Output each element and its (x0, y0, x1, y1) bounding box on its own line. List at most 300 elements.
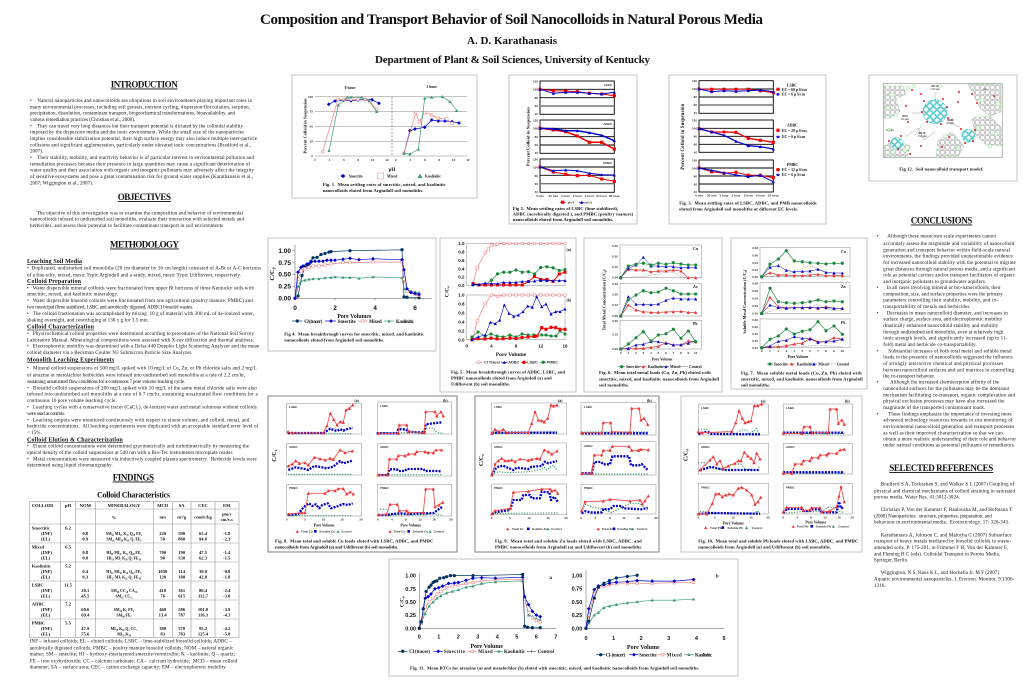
label b: (b) (845, 400, 850, 404)
legend: Mixed (670, 365, 681, 369)
text block: conclusions: ionic strength levels, and significantly increased (up to 11- (883, 337, 1008, 342)
text: monolith leaching experiments: continuous 16 pore volume leaching cycle. (27, 399, 117, 404)
table: colloid characteristics: 39.0 (199, 569, 208, 574)
plot: LSBC (533, 80, 614, 116)
plot: b: 0.6 (458, 311, 465, 316)
plots: column a: PMBC (289, 486, 299, 490)
axis label: Soluble Metal Concentration (C/C₀) (742, 269, 747, 334)
plots: column b: LSBC (786, 406, 795, 410)
axis label: C/C₀ (479, 454, 485, 466)
legend: Smectite (338, 320, 356, 325)
axis label: Percent Colloid in Suspension (681, 103, 686, 170)
table: colloid characteristics: SM₄₅ MI₂₅ K₁₅ Q₁₀ FE₅ (106, 532, 143, 536)
plots: column b: 4 (391, 518, 393, 522)
caption (323, 182, 446, 193)
table: colloid characteristics: 116.3 (198, 613, 209, 618)
text: monolith leaching experiments: • Leaching cycles with a conservative tracer (CaCl₂), de-ionized water and metal solutions without colloids (27, 406, 257, 411)
plots: column b: 20 (449, 518, 453, 522)
plot: LSBC: 120 (533, 80, 538, 84)
plot: ADBC: ADBC (603, 122, 613, 126)
subheading: colloid characterization: Colloid Characterization (27, 325, 95, 331)
plot: Pb: 1 (769, 349, 771, 353)
axis title: Pore Volume (652, 358, 673, 362)
plot: ADBC: 60 (535, 143, 538, 147)
plots: column a: 20 (564, 516, 568, 520)
table: colloid characteristics: EM (223, 503, 231, 508)
text block: conclusions: • (877, 381, 879, 386)
plot: Pb: 10 (694, 351, 698, 355)
plot: Cu: 0.00 (612, 276, 618, 280)
axis title a: Pore Volume (723, 522, 744, 526)
plot: PMBC: 120 (533, 158, 538, 162)
text block: introduction: of sensitive ecosystems and pose a great contamination risk for ground water supplies (Karathanasis et al., (30, 175, 253, 180)
plot: PMBC: 3 hour (744, 194, 754, 198)
plot: Pb: 2 (635, 351, 637, 355)
plots: column a: 20 (359, 518, 363, 522)
axis title b: Pore Volume (400, 524, 421, 528)
text block: introduction: 2007; Wiggington et al., 2007). (30, 181, 93, 186)
table notes: aerobically digested colloids; PMBC – poultry manure biosolid colloids; NOM – natural organic (30, 646, 234, 651)
table: colloid characteristics: SM₇₀ K₅ FE₅ (114, 608, 135, 612)
text: leaching soil media: • Duplicated, undisturbed soil monoliths (20 cm diameter by 36 cm length) consisted of A-Bt or A-C horizons (27, 266, 261, 271)
caption: Fig. 3. Mean settling rates of LSBC, ADBC, and PMB nanocolloids (679, 200, 817, 205)
caption: Fig. 5. Mean breakthrough curves of ADBC, LSBC, and (451, 370, 565, 375)
table: colloid characteristics: 112.7 (198, 594, 209, 599)
heading: conclusions: CONCLUSIONS (911, 216, 972, 226)
panel: figure 1 settling rates by pH: 2 (314, 158, 316, 162)
text block: references: physical and chemical mechanisms of colloid straining in saturated (874, 489, 1016, 494)
plots: column b: 12 (418, 518, 422, 522)
text block: conclusions: fold) metal and herbicide co-transportability. (883, 343, 977, 348)
text: monolith leaching experiments: were used as controls. (27, 412, 65, 417)
panel: figure 4 breakthrough curves: 0 (293, 305, 297, 312)
plots: column a: LSBC (701, 406, 710, 410)
legend b: Control (637, 527, 648, 531)
table: colloid characteristics: cm/v.s (221, 517, 233, 522)
table: colloid characteristics: -2.3 (223, 537, 231, 542)
plot: PMBC: 30 min (707, 194, 717, 198)
table: colloid characteristics: 94.8 (199, 537, 208, 542)
model labels (886, 86, 987, 138)
plot: Pb: 3 (785, 349, 787, 353)
series: mixed (323, 99, 452, 153)
plot: PMBC: 2 hour (731, 194, 741, 198)
text: colloid preparation: smectitic, mixed, and kaolinitic mineralogy. (27, 293, 118, 298)
text: monolith leaching experiments: of atrazine or metolachlor herbicides were infused into undisturbed soil monoliths at a rate of 2.2 cm/hr, (27, 374, 245, 379)
text block: references: behaviour in environmental media. Ecotoxicology. 17: 326-343. (874, 521, 1009, 526)
panel: figure 1 settling rates by pH: 0 (311, 154, 313, 158)
table: colloid characteristics: SM₃₀ CC₅₀ CA₂₀ (111, 589, 138, 593)
series: smectite (295, 258, 419, 298)
microbial and organic coatings (886, 84, 1000, 154)
table: colloid characteristics: 220 (159, 531, 167, 536)
plot: b (458, 293, 568, 348)
table: colloid characteristics: 114 (178, 569, 186, 574)
axis label: Percent Colloid in Suspension (302, 98, 308, 154)
plot: b: 0.0 (458, 337, 465, 342)
plots: column b: 20 (850, 516, 854, 520)
text: colloid elution and characterization: determined using liquid chromatography. (27, 464, 113, 469)
text block: conclusions: In all cases involving mineral or bio-nanocolloids, their (887, 286, 1001, 291)
text block: conclusions: surface charge, surface area, and electrophoretic mobility (883, 318, 1003, 323)
text block: conclusions: and inorganic pollutants to groundwater aquifers. (883, 280, 986, 285)
nanocolloid lattices (891, 100, 975, 149)
label a: (a) (354, 399, 360, 403)
table: colloid characteristics: SA (179, 503, 185, 508)
table: colloid characteristics: 0.8 (82, 550, 89, 555)
soil aggregates (884, 84, 1002, 157)
plot: a atrazine: 4 (496, 635, 500, 641)
heading: findings: FINDINGS (113, 472, 154, 482)
table: colloid characteristics: -1.5 (223, 556, 231, 561)
plot: PMBC (692, 158, 780, 198)
plot: a: 1.0 (458, 241, 465, 246)
panel: figure 11 herbicide breakthrough curves (389, 559, 738, 676)
table: colloid characteristics: 570 (178, 626, 186, 631)
table: colloid characteristics: MCD (157, 503, 169, 508)
plots: column b: 8 (405, 518, 407, 522)
table: colloid characteristics: Mixed (32, 544, 45, 549)
plot: a atrazine: 2 (457, 635, 460, 641)
plot: Pb: 5 (801, 349, 803, 353)
caption: PMBC nanocolloids eluted from Argiudoll (a) and (451, 376, 552, 381)
plot: Zn: 0.00 (612, 314, 618, 318)
plots: column a: ADBC (701, 445, 710, 449)
caption (698, 539, 858, 550)
plot: PMBC: 6 hour (756, 194, 766, 198)
plot: PMBC: 1 hour (719, 194, 729, 198)
table: colloid characteristics: 0.4 (82, 569, 89, 574)
text block: conclusions: loads in the presence of nanocolloids suggested the influence (883, 356, 1013, 361)
plot: b: 0.2 (458, 328, 465, 334)
plot: Pb: 0.15 (752, 332, 758, 336)
table: colloid characteristics: -3.9 (223, 607, 231, 612)
panel: figure 4 breakthrough curves: 0.50 (278, 272, 291, 279)
plot: LSBC: 100 (692, 87, 697, 91)
panel: figure 1 settling rates by pH: 8 (438, 158, 440, 162)
legend a: Control (538, 650, 555, 655)
legend a: Soluble Zn (532, 527, 548, 531)
heading: methodology: METHODOLOGY (110, 240, 180, 250)
table: colloid characteristics: 125.4 (198, 632, 209, 637)
label a: (a) (566, 248, 572, 252)
text block: conclusions: Decreases in mean nanocolloid diameter, and increases in (887, 311, 1008, 316)
legend a: Soluble Pb (728, 526, 743, 530)
caption: Fig 12. Soil nanocolloid transport model. (899, 167, 983, 172)
plot: LSBC: 120 (692, 79, 697, 83)
model labels: INF-FE (918, 133, 926, 135)
caption: Udifluvent (b) soil monoliths. (451, 382, 510, 387)
text block: objectives: The objective of this investigation was to examine the composition and behavior of environmental (37, 211, 244, 216)
text block: conclusions: physical exclusion processes may have also increased the (883, 400, 1005, 405)
table: colloid characteristics: SM₄₅ CC₅₅ (115, 595, 133, 599)
plot: Cu: 0.30 (612, 244, 618, 248)
legend a: Kaolinitic (504, 650, 526, 655)
plot: Cu: Cu (693, 247, 699, 251)
text: monolith leaching experiments (27, 366, 259, 436)
table: colloid characteristics: 5.5 (65, 620, 72, 625)
text: colloid elution and characterization: optical density of the colloid suspensions at 540 nm with a Bio-Tec instruments microplate reader. (27, 451, 233, 456)
panel: figure 1 settling rates by pH: 2 (395, 158, 397, 162)
legend a: Smectite (444, 650, 465, 655)
text block: introduction: • They can travel very long distances but their transport potential is dictated by the colloidal stability (30, 124, 244, 129)
heading: selected references: SELECTED REFERENCES (889, 463, 993, 473)
table: colloid characteristics (30, 502, 239, 637)
affiliation: Department of Plant & Soil Sciences, University of Kentucky (375, 54, 650, 66)
legend a (296, 530, 352, 534)
table: colloid characteristics: -1.8 (223, 575, 231, 580)
table: colloid characteristics: 76 (160, 594, 166, 599)
text block: introduction (30, 99, 258, 186)
plot: Zn (612, 282, 702, 318)
plot: a atrazine (405, 573, 557, 641)
plot: Pb: 2 (777, 349, 779, 353)
table: colloid characteristics: SM₄₅ MI₃₀ K₁₀ Q₅ FE₅ (106, 538, 142, 542)
model labels: 0.5 μm (946, 123, 954, 125)
plot: PMBC: 60 (535, 182, 538, 186)
text block: conclusions (877, 235, 1016, 449)
plots: column b: 0 (580, 516, 582, 520)
plot: PMBC: PMBC (603, 161, 613, 165)
axis label: Total Metal Concentration (C/C₀) (602, 269, 606, 330)
plots: column b: LSBC (584, 405, 593, 409)
legend (560, 201, 592, 205)
plot: a: 0.6 (458, 258, 465, 263)
plot: Zn (752, 282, 850, 316)
plot: b metolachlor: 0.75 (572, 587, 582, 593)
table: colloid characteristics: 0.9 (82, 537, 89, 542)
text block: references: and Fleming H C (eds). Colloidal Transport in Porous Media, (874, 552, 1000, 557)
legend: Mixed (818, 362, 830, 366)
plot: Pb: Pb (841, 321, 845, 325)
plot: b metolachlor: 4 (695, 636, 699, 642)
text block: objectives (30, 211, 244, 229)
panel: figure 3 settling rates at EC levels (669, 75, 826, 224)
label b: (b) (566, 298, 572, 302)
plot: b: 0 (465, 344, 468, 348)
caption: Fig. 7. Mean soluble metal loads (Cu, Zn, Pb) eluted with (741, 370, 862, 375)
plot: Pb: 0.20 (752, 325, 758, 329)
heading: objectives: OBJECTIVES (118, 192, 171, 202)
table: colloid characteristics: 783 (178, 632, 186, 637)
plot: b metolachlor (572, 570, 726, 642)
plots: column b (782, 404, 854, 520)
panel: figure 1 settling rates by pH: 8 (357, 158, 359, 162)
plot: PMBC: 0 min (536, 194, 544, 198)
label: 0 hour: 0 hour (345, 86, 356, 90)
legend: ADBC: ADBC (787, 124, 798, 128)
text: monolith leaching experiments: • Leaching outputs were monitored continuously with respect to eluent volume, and colloid, metal, and (27, 418, 250, 423)
subheading: monolith leaching experiments: Monolith Leaching Experiments (27, 357, 115, 363)
legend (618, 365, 702, 369)
caption: smectitic, mixed, and kaolinitic nanocolloids from Argiudoll (741, 376, 863, 381)
legend: Cl (tracer) (304, 320, 323, 325)
text block: methodology (27, 259, 261, 469)
table: colloid characteristics: HI₅₀ MI₅ K₃₀ Q₅ FE₁₀ (107, 557, 142, 561)
plot: b: 8 (515, 344, 518, 348)
caption: nanocolloids eluted from Argiudoll soil monoliths. (323, 188, 423, 193)
plot: b metolachlor: 0 (584, 636, 588, 642)
plot: Pb: 9 (833, 349, 835, 353)
legend b (792, 525, 849, 529)
plot: PMBC: 100 (533, 166, 538, 170)
panel: figure 4 breakthrough curves (268, 238, 436, 351)
table: colloid characteristics: 0.8 (82, 531, 89, 536)
plots: column a (697, 404, 770, 520)
panel: figure 12 transport model (869, 75, 1017, 181)
text: monolith leaching experiments: < 15%. (27, 431, 42, 436)
panel: figure 1 settling rates by pH: 100 (308, 95, 313, 99)
table: colloid characteristics: (EL) (41, 537, 51, 542)
panel: figure 6 total metal loads (584, 238, 722, 392)
plot: b metolachlor: 5 (722, 636, 726, 642)
table title: Colloid Characteristics (97, 490, 170, 500)
series: kaolinitic (295, 277, 419, 298)
table: colloid characteristics: 90 (160, 556, 166, 561)
table: colloid characteristics: 69.4 (81, 613, 90, 618)
legend: Control (837, 362, 849, 366)
plots: column a: 20 (766, 516, 770, 520)
caption: Fig. 10. Mean total and soluble Pb loads eluted with LSBC, ADBC, and PMBC (698, 539, 858, 544)
panel: figure 4 breakthrough curves: 6 (413, 305, 417, 312)
plot: LSBC: 40 (535, 112, 538, 116)
legend: ADBC: EC = 29 μ S/cm (782, 129, 808, 133)
text block: conclusions: for increased nanocolloid stability with the potential to migrate (883, 261, 1016, 266)
text block: conclusions: Although these mesocosm scale experiments cannot (887, 235, 997, 240)
text block: objectives: nanocolloids infused to undisturbed soil monoliths, evaluate their interaction with selected metals and (30, 218, 244, 223)
legend a: Control (341, 530, 352, 534)
table: colloid characteristics: 42.0 (199, 575, 208, 580)
text block: objectives: herbicides, and assess their potential to facilitate contaminant transport in soil environments (30, 224, 223, 229)
table: colloid characteristics: 45.5 (81, 594, 90, 599)
axis label: C/C₀ (269, 267, 276, 281)
table: colloid characteristics: 120 (159, 575, 167, 580)
table notes: FE – iron oxyhydroxide; CC – calcium carbonate; CA - calcium hydroxide; MCD – mean colloid (30, 659, 238, 664)
table: colloid characteristics: 787 (178, 613, 186, 618)
table: colloid characteristics: 5.2 (65, 563, 72, 568)
table: colloid characteristics: -4.3 (223, 613, 231, 618)
plots: column b: 4 (796, 516, 798, 520)
plot: a atrazine: 1 (437, 635, 440, 641)
text block: introduction: various remediation practices (Christian et al., 2008). (30, 118, 135, 123)
table: colloid characteristics: SM₈₀ FE₅ (116, 614, 132, 618)
caption (451, 370, 565, 387)
plot: a atrazine: 0.25 (405, 613, 416, 619)
plot: ADBC: 40 (694, 150, 697, 154)
text: colloid characterization (27, 332, 260, 356)
legend: Control (689, 365, 702, 369)
plot: ADBC: 120 (533, 118, 538, 122)
text: colloid characterization: colloid diameter via a Beckman Coulter N5 Submicron Particle Size Analyzer. (27, 351, 192, 356)
text block: introduction: remediation processes because their presence in large quantities may cause a significant deterioration of (30, 162, 250, 167)
plot: Pb: 0.10 (752, 339, 758, 343)
caption: ADBC (aerobically digested ), and PMBC (poultry manure) (513, 211, 634, 216)
plot: Pb: 0 (761, 349, 763, 353)
axis title: Pore Volumes (337, 314, 372, 320)
caption: Fig 2. Mean settling rates of LSBC (lime stabilized), (513, 206, 618, 211)
plot: Pb: 0.30 (612, 319, 618, 323)
text block: references: Aquatic environmental nanoparticles. J. Environ. Monitor. 9:1306- (874, 578, 1015, 583)
table: colloid characteristics: -5.8 (223, 632, 231, 637)
plot: Pb: 0.00 (612, 347, 618, 351)
text block: conclusions: These findings emphasize the importance of investing more (888, 412, 1012, 417)
caption (275, 539, 433, 550)
table: colloid characteristics: HI₂₀ MI₂₅ K₂₅ Q₂₀ FE₅ (106, 551, 142, 555)
caption (741, 370, 863, 387)
legend: Smectite (349, 174, 363, 178)
plot: ADBC: 80 (535, 135, 538, 139)
plot: Pb: 9 (687, 351, 689, 355)
plot: PMBC: 100 (692, 166, 697, 170)
plot: b: 0.4 (458, 320, 465, 324)
text block: conclusions: • (877, 235, 879, 240)
label b: (b) (443, 399, 448, 403)
plot: ADBC: 40 (535, 151, 538, 155)
plot: ADBC: 100 (533, 126, 538, 130)
text block: conclusions: transportability of metals and herbicides. (883, 305, 971, 310)
plots: column b: ADBC (786, 445, 795, 449)
plot: a (458, 241, 565, 288)
legend b: Mixed (667, 653, 682, 658)
plot: b: 4 (490, 344, 493, 348)
table: colloid characteristics: 60.6 (81, 607, 90, 612)
caption: smectitic, mixed, and kaolinitic nanocolloids from Argiudoll (599, 376, 720, 381)
plot: Pb: 10 (841, 349, 844, 353)
callout leaders (905, 92, 960, 140)
table: colloid characteristics: MI₅₀ K₃₀ (117, 633, 132, 637)
model labels: < 0.1 μm (930, 88, 940, 91)
plot: Pb: 4 (793, 349, 795, 353)
table notes: diameter; SA – surface area; CEC – cation exchange capacity; EM – electrophoretic mobility (30, 666, 226, 671)
plot: Pb: 3 (642, 351, 644, 355)
text block: references: Karathanasis A, Johnson C, and Matocha C (2007) Subsurface (881, 533, 1012, 538)
text block: references: 1316. (874, 584, 886, 589)
plot: b metolachlor: 1.00 (572, 573, 582, 579)
panel: figure 2 settling rates of biosolid colloids (509, 75, 637, 224)
caption (513, 206, 634, 222)
panel: figure 1 settling rates by pH: 25 (310, 140, 313, 144)
legend a: Control (551, 527, 562, 531)
legend b (388, 530, 444, 534)
table notes: matter; SM – smectite; HI – hydroxy-interlayered smectite/vermiculite; K – kaolinite; Q – quartz; (30, 653, 235, 658)
plot: Cu (612, 244, 702, 280)
text block: references: transport of heavy metals mediated by biosolid colloids in waste- (874, 540, 1011, 545)
caption: soil monoliths. (599, 382, 629, 387)
text: monolith leaching experiments: • Mineral colloid suspensions of 500 mg/L spiked with 10 mg/L of Cu, Zn, or Pb chloride salts and 2 mg/L (27, 366, 257, 371)
text block: conclusions: under natural conditions as potential pollutants or remediators. (883, 444, 1015, 449)
plot: Pb: 0.15 (612, 332, 618, 336)
legend: pH 9 (586, 201, 592, 205)
legend b (596, 653, 713, 658)
plot: b metolachlor: 0.25 (572, 613, 582, 619)
plot: PMBC: 40 (694, 190, 697, 194)
text: colloid preparation: • Water dispersible biosolid colloids were fractionated from one agricultural (poultry manure; PMBC) and (27, 299, 253, 304)
plot: a atrazine: 1.00 (405, 574, 416, 580)
table notes (30, 640, 238, 671)
legend b: Soluble Cu (412, 530, 428, 534)
text block: conclusions: drastically enhanced nanocolloid stability and mobility (883, 324, 999, 329)
legend b: Control (434, 530, 444, 534)
table: colloid characteristics: -2.4 (223, 588, 231, 593)
text block: conclusions: environmental nanocolloid generation and transport processes (883, 425, 1014, 430)
panel: figure 1 settling rates by pH: 6 (424, 158, 426, 162)
plot: Zn: Zn (693, 285, 699, 289)
table: colloid characteristics: 20.1 (81, 588, 90, 593)
table: colloid characteristics: 65.4 (199, 531, 208, 536)
plot: Pb: 5 (657, 351, 659, 355)
plot: PMBC: 1 hour (561, 194, 571, 198)
table: colloid characteristics: 330 (178, 556, 186, 561)
